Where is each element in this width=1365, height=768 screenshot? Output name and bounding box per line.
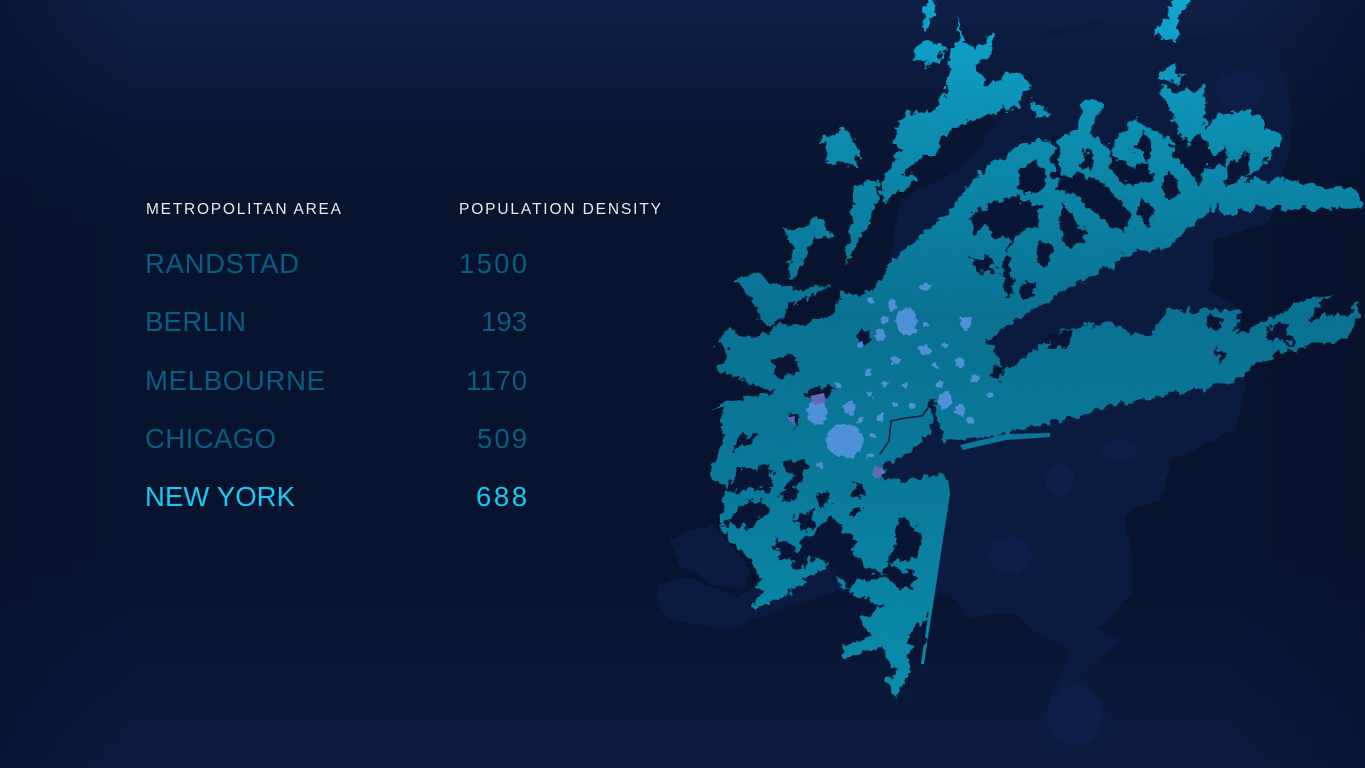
map: New York metropolitan area (656, 0, 1364, 751)
table: metropolitan area population density (145, 201, 661, 512)
row: Melbourne (145, 365, 527, 396)
map: suburban texture on the base (988, 70, 1265, 745)
row: Chicago: 509 (477, 423, 527, 454)
row: Randstad: RANDSTAD (145, 248, 299, 279)
map: densest neighborhoods in blue (807, 283, 993, 478)
row: New York highlighted (145, 481, 527, 512)
map: unbuilt gaps inside the urban area (723, 130, 1295, 651)
row: Chicago (145, 423, 527, 454)
column heading: population density: POPULATION DENSITY (459, 201, 661, 218)
row: Melbourne: 1170 (466, 365, 527, 396)
row: New York highlighted: NEW YORK (145, 481, 296, 512)
row: Chicago: CHICAGO (145, 423, 276, 454)
row: Randstad (145, 248, 527, 279)
row: New York highlighted: 688 (476, 481, 527, 512)
map: eastern New Jersey shore and barrier strip (900, 433, 1050, 664)
column heading: metropolitan area: METROPOLITAN AREA (146, 201, 342, 218)
row: Berlin (145, 306, 527, 337)
row: Randstad: 1500 (459, 248, 527, 279)
map: mixed-density patches in purple (786, 393, 883, 478)
row: Berlin: BERLIN (145, 306, 246, 337)
map: Hudson river line (880, 405, 930, 454)
map: urbanized area in teal (711, 0, 1364, 697)
row: Berlin: 193 (481, 306, 527, 337)
map: dark regional base (656, 20, 1290, 751)
row: Melbourne: MELBOURNE (145, 365, 325, 396)
